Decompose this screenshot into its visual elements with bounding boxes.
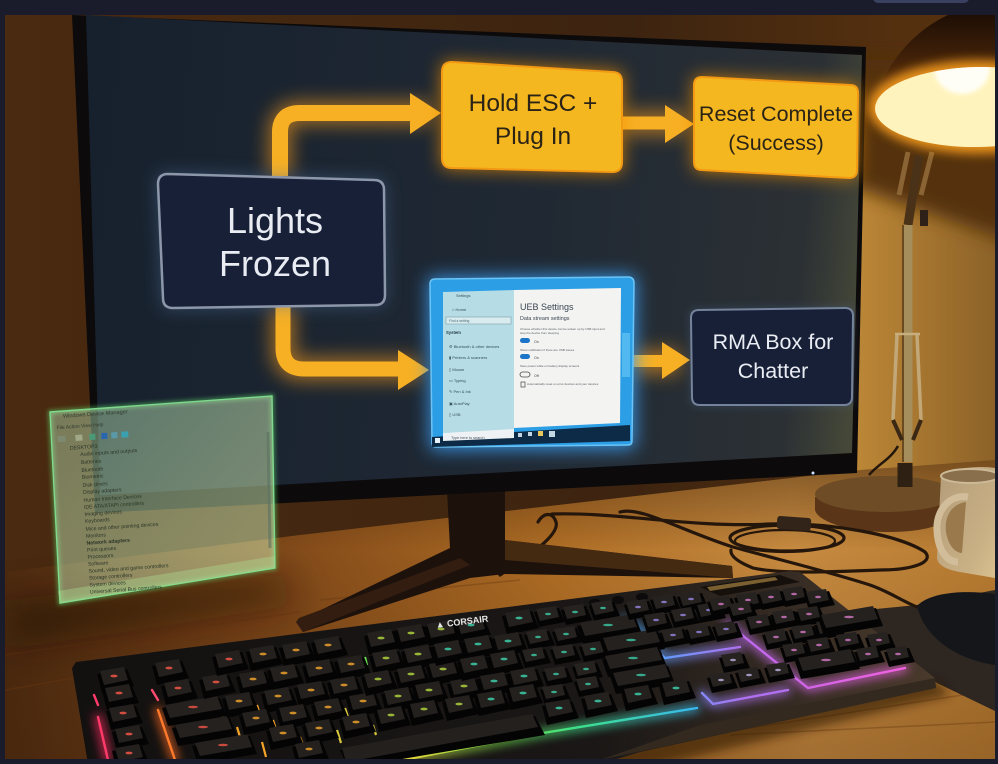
taskbar <box>432 425 630 447</box>
window blue glow <box>428 275 636 450</box>
navigation keys <box>624 591 743 648</box>
settings sidebar: ⚙ Bluetooth & other devices <box>449 344 499 349</box>
wall shadow below lamp shade <box>863 110 995 246</box>
wall right of monitor <box>857 178 995 470</box>
settings content pane: On <box>534 356 539 360</box>
settings content pane <box>514 288 621 428</box>
desk <box>5 460 995 759</box>
settings content pane: Choose whether this device can be woken up by USB input and <box>520 327 605 331</box>
window title and menu <box>56 409 130 442</box>
power LED <box>812 472 814 474</box>
flow box: lights frozen <box>158 174 385 308</box>
key gap lights <box>220 647 462 757</box>
device tree list: Bluetooth <box>81 466 104 474</box>
scrollbar <box>268 432 270 548</box>
media buttons <box>589 575 800 607</box>
settings content pane: Automatically reset on error devices and your devices <box>527 382 599 386</box>
settings content pane: Save power while on battery display screens <box>520 364 580 368</box>
device tree list: Universal Serial Bus controllers <box>90 585 162 596</box>
monitor screen <box>86 15 862 495</box>
flow box: RMA box for chatter: RMA Box for <box>713 330 833 354</box>
translucent device manager window <box>50 396 275 603</box>
flow box: lights frozen: Lights <box>227 200 323 241</box>
cables <box>500 511 927 607</box>
arrow: USB settings to RMA box <box>633 342 690 379</box>
device tree list: DESKTOP3 <box>70 444 98 452</box>
settings content pane: stop the device from sleeping <box>520 331 559 335</box>
arrow: lights frozen to USB settings <box>283 306 429 390</box>
device tree list: Display adapters <box>83 487 122 496</box>
settings sidebar: System <box>446 330 461 335</box>
arrow: lights frozen to hold ESC <box>280 93 441 176</box>
flow box: hold ESC and plug in <box>442 62 622 172</box>
backlight strips <box>94 620 905 760</box>
flow box: lights frozen: Frozen <box>219 243 331 284</box>
main keys, yellow-green zone <box>361 620 484 732</box>
main keys, orange zone <box>222 636 383 764</box>
settings content pane: Data stream settings <box>520 316 570 322</box>
top bar pill <box>873 0 969 3</box>
monitor bezel <box>72 15 866 513</box>
mouse pad <box>872 590 995 711</box>
Windows USB settings window <box>428 275 636 450</box>
lamp glow <box>868 60 998 154</box>
device tree list: Mice and other pointing devices <box>85 522 159 533</box>
arrow keys <box>707 652 795 693</box>
flow box: RMA box for chatter: Chatter <box>738 359 808 383</box>
device tree list: Keyboards <box>85 517 110 525</box>
panel glow <box>50 396 275 603</box>
device tree list: Sound, video and game controllers <box>88 563 169 575</box>
lamp arm <box>869 152 932 487</box>
settings sidebar: ▯ USB <box>449 412 461 417</box>
device tree list: Audio inputs and outputs <box>80 448 138 458</box>
mug <box>937 467 998 578</box>
device tree list: IDE ATA/ATAPI controllers <box>84 501 145 511</box>
lamp shade <box>886 15 995 75</box>
device tree list <box>70 439 171 596</box>
monitor stand <box>296 486 733 632</box>
device tree list: Batteries <box>81 459 102 466</box>
flow box: hold ESC and plug in: Plug In <box>495 123 571 150</box>
device tree list: Human Interface Devices <box>83 494 142 504</box>
monitor <box>72 15 866 632</box>
macro keys, red zone <box>97 650 257 764</box>
settings content pane: Show notification if there are USB issues <box>520 348 575 352</box>
settings content pane: On <box>534 340 539 344</box>
lamp bulb <box>932 67 992 96</box>
desktop background <box>430 277 634 447</box>
wall behind monitor <box>5 15 948 572</box>
keyboard shadow <box>90 680 950 764</box>
flow box: reset complete: Reset Complete <box>699 102 853 126</box>
settings sidebar: Find a setting <box>449 319 469 323</box>
flow box: reset complete: (Success) <box>728 131 824 155</box>
settings sidebar: ⌂ Home <box>452 307 467 312</box>
space bar <box>340 714 545 764</box>
main keys, teal zone <box>431 600 696 725</box>
device tree list: Software <box>88 560 109 568</box>
device tree list: Monitors <box>86 532 107 540</box>
settings content pane: UEB Settings <box>520 302 574 312</box>
device tree list: Imaging devices <box>84 509 123 518</box>
glass panel <box>50 396 275 603</box>
device tree list: Biometric <box>82 473 104 481</box>
flow box: hold ESC and plug in: Hold ESC + <box>469 90 597 117</box>
taskbar: Type here to search <box>451 436 485 440</box>
keyboard body <box>72 571 936 764</box>
device tree list: Network adapters <box>86 538 130 547</box>
numeric keypad <box>707 586 915 679</box>
brand logo: ▲ CORSAIR <box>435 614 489 630</box>
backlight strip glow <box>98 620 905 760</box>
settings sidebar: ▮ Printers & scanners <box>449 355 487 360</box>
lamp <box>815 15 998 532</box>
device tree list: Storage controllers <box>89 573 133 582</box>
window title and menu: Windows Device Manager <box>63 409 128 420</box>
device tree list: Print queues <box>87 546 117 554</box>
window title and menu: File Action View Help <box>56 422 104 431</box>
device tree list: System devices <box>89 580 126 589</box>
settings sidebar <box>443 290 514 433</box>
device tree list: Processors <box>87 553 114 561</box>
flow box: reset complete <box>694 77 858 178</box>
settings sidebar: Settings <box>456 293 470 298</box>
panel bottom edge <box>58 556 275 603</box>
bottom frame bar <box>0 759 998 764</box>
settings sidebar: ▣ AutoPlay <box>449 401 470 406</box>
flow box: RMA box for chatter <box>691 308 853 405</box>
settings sidebar: ▭ Typing <box>449 378 466 383</box>
lamp light opening <box>874 65 998 149</box>
settings content pane: Off <box>534 374 539 378</box>
lamp base <box>815 476 940 532</box>
device tree list: Disk drives <box>82 481 108 489</box>
window contents <box>432 288 630 447</box>
flow arrows glow <box>280 113 685 369</box>
settings sidebar: ▯ Mouse <box>449 367 465 372</box>
arrow: hold ESC to reset complete <box>623 105 694 143</box>
mouse <box>917 592 995 665</box>
cable connector <box>777 516 811 531</box>
settings sidebar: ✎ Pen & Ink <box>449 389 471 394</box>
keyboard <box>72 571 936 764</box>
